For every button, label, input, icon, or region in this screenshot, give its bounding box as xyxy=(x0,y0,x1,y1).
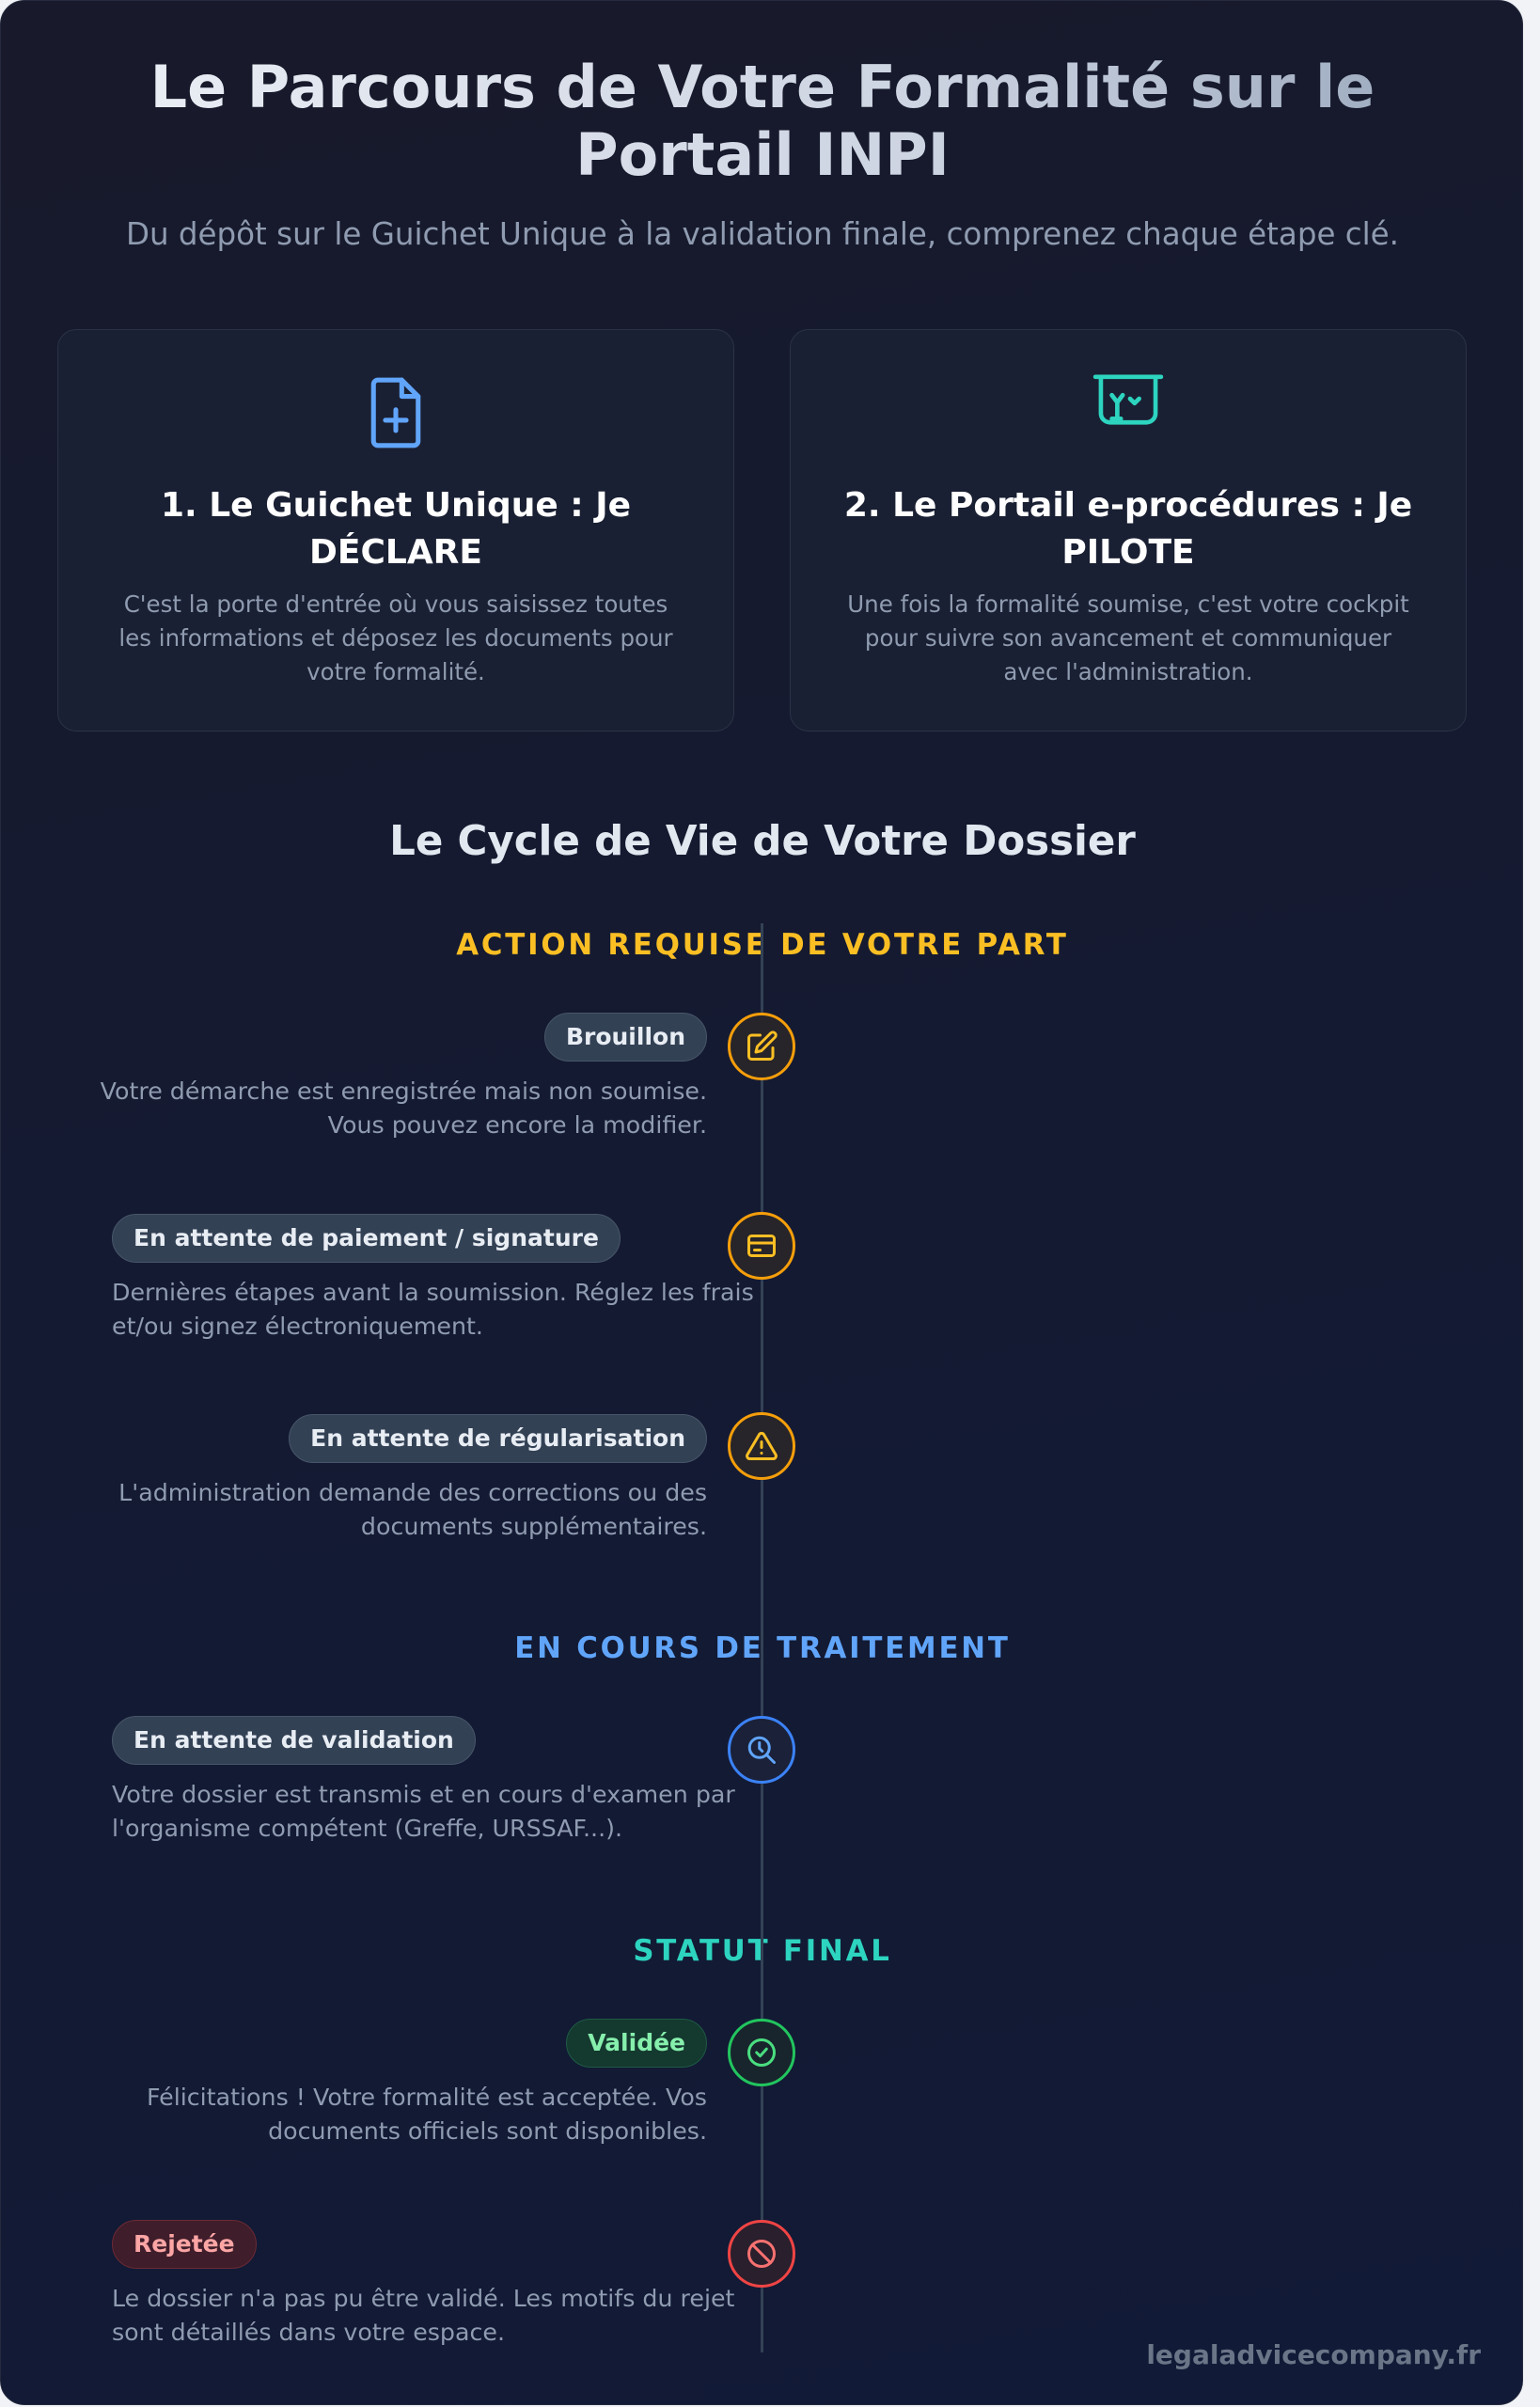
icon: search clock xyxy=(728,1716,795,1784)
section heading: Le Cycle de Vie de Votre Dossier xyxy=(389,818,1136,865)
step: paiement: Dernières étapes avant la soumission. Réglez les frais xyxy=(112,1279,754,1306)
step: rejetée: Le dossier n'a pas pu être validé. Les motifs du rejet xyxy=(112,2285,734,2312)
step: régularisation: documents supplémentaires. xyxy=(361,1513,707,1540)
step: validation: En attente de validation xyxy=(134,1726,454,1754)
heading xyxy=(844,486,1412,572)
icon: check xyxy=(728,2019,795,2086)
step: validation: l'organisme compétent (Greffe, URSSAF...). xyxy=(112,1815,622,1842)
icon: warning xyxy=(728,1412,795,1480)
step: validée: Félicitations ! Votre formalité est acceptée. Vos xyxy=(147,2084,707,2111)
icon: cockpit xyxy=(1092,374,1164,425)
label: action requise: ACTION REQUISE DE VOTRE PART xyxy=(456,928,1069,962)
step: validée: Validée xyxy=(588,2029,685,2056)
step: validation xyxy=(112,1716,735,1842)
step: validée: documents officiels sont disponibles. xyxy=(268,2117,707,2145)
panel: guichet unique xyxy=(57,329,734,732)
step: rejetée xyxy=(112,2220,734,2346)
text: C'est la porte d'entrée où vous saisissez toutes les informations et déposez les documents pour votre formalité. xyxy=(118,590,673,685)
title: Portail INPI xyxy=(575,120,950,189)
subtitle: Du dépôt sur le Guichet Unique à la validation finale, comprenez chaque étape clé. xyxy=(126,216,1399,252)
icon: edit xyxy=(728,1013,795,1080)
step: validée xyxy=(147,2019,707,2145)
footer: legaladvicecompany.fr xyxy=(1146,2339,1481,2370)
heading: 2. Le Portail e-procédures : Je xyxy=(844,486,1412,525)
text: Une fois la formalité soumise, c'est votre cockpit pour suivre son avancement et communiquer avec l'administration. xyxy=(847,590,1409,685)
icon: document plus xyxy=(370,378,421,448)
step: régularisation: L'administration demande des corrections ou des xyxy=(118,1479,707,1506)
label: statut final: STATUT FINAL xyxy=(633,1934,892,1968)
step: rejetée: Rejetée xyxy=(134,2230,235,2258)
step: validation: Votre dossier est transmis et en cours d'examen par xyxy=(112,1781,735,1808)
panel: portail e-procédures xyxy=(790,329,1467,732)
timeline line xyxy=(761,923,763,2352)
heading xyxy=(161,486,631,572)
step: régularisation: En attente de régularisation xyxy=(310,1424,685,1452)
step: paiement: et/ou signez électroniquement. xyxy=(112,1313,483,1340)
step: brouillon: Vous pouvez encore la modifier. xyxy=(328,1111,707,1139)
label: en cours: EN COURS DE TRAITEMENT xyxy=(514,1631,1011,1665)
step: paiement xyxy=(112,1214,754,1340)
heading: 1. Le Guichet Unique : Je xyxy=(161,486,631,525)
title: Le Parcours de Votre Formalité sur le xyxy=(150,53,1375,121)
step: brouillon: Brouillon xyxy=(566,1023,685,1050)
step: brouillon xyxy=(100,1013,707,1139)
step: régularisation xyxy=(118,1414,707,1540)
icon: card xyxy=(728,1212,795,1280)
step: brouillon: Votre démarche est enregistrée mais non soumise. xyxy=(101,1078,707,1105)
step: rejetée: sont détaillés dans votre espace. xyxy=(112,2319,505,2346)
icon: forbidden xyxy=(728,2220,795,2288)
heading: PILOTE xyxy=(1061,533,1195,572)
title xyxy=(1,54,1524,189)
step: paiement: En attente de paiement / signature xyxy=(134,1224,599,1251)
heading: DÉCLARE xyxy=(309,533,482,572)
